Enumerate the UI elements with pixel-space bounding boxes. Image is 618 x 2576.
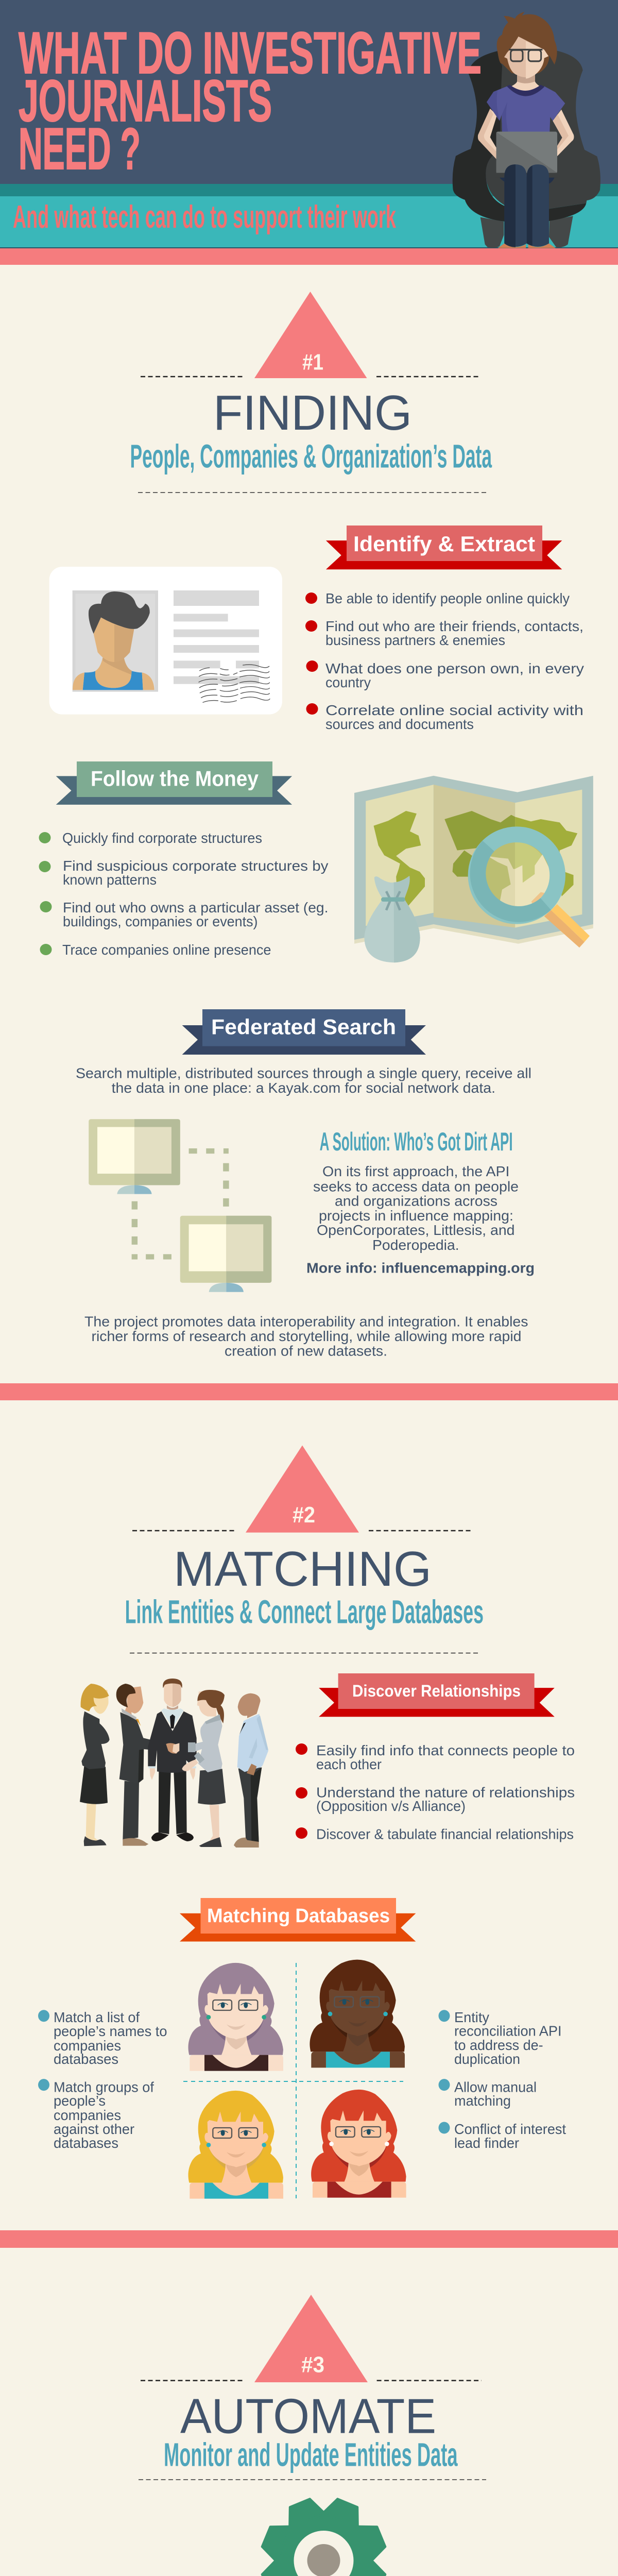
icon: id card xyxy=(49,567,282,715)
panel: section 3 automate xyxy=(80,2295,558,2576)
list: matching tools: to address de- xyxy=(454,2037,543,2053)
list: matching tools: matching xyxy=(454,2093,511,2109)
list: follow the money: Find suspicious corporate structures by xyxy=(63,858,329,874)
list: discover relationships: Discover & tabulate financial relationships xyxy=(316,1826,574,1842)
solution text block xyxy=(306,1163,535,1276)
list: identify and extract: country xyxy=(325,674,371,690)
list: follow the money xyxy=(39,830,329,958)
list: match people: people’s names to xyxy=(54,2023,167,2039)
panel: header xyxy=(0,0,618,265)
list: discover relationships: Understand the nature of relationships xyxy=(316,1785,575,1801)
text: project description: The project promotes data interoperability and integration. It enables xyxy=(84,1314,528,1330)
list: follow the money: Find out who owns a particular asset (eg. xyxy=(63,900,329,916)
ribbon: federated search xyxy=(182,1009,426,1055)
illustration: five business people shaking hands xyxy=(80,1679,268,1848)
list: matching tools: reconciliation API xyxy=(454,2023,562,2039)
solution text block: On its first approach, the API xyxy=(322,1163,510,1179)
section 1 heading: FINDING xyxy=(213,385,412,440)
list: identify and extract xyxy=(305,590,584,732)
list: identify and extract: Find out who are their friends, contacts, xyxy=(325,618,583,634)
list: follow the money: buildings, companies or events) xyxy=(63,913,258,929)
section 3 heading: AUTOMATE xyxy=(180,2389,436,2444)
list: matching tools: Entity xyxy=(454,2009,489,2025)
panel: section 1 finding xyxy=(39,292,593,1359)
list: follow the money: known patterns xyxy=(63,872,157,888)
text: project description xyxy=(84,1314,528,1359)
ribbon: discover relationships xyxy=(319,1673,555,1717)
list: matching tools: Allow manual xyxy=(454,2079,537,2095)
list: identify and extract: sources and documents xyxy=(325,716,474,732)
ribbon: identify and extract: Identify & Extract xyxy=(353,532,535,556)
title: JOURNALISTS xyxy=(19,69,272,134)
list: match people: companies xyxy=(54,2107,121,2123)
solution text block: and organizations across xyxy=(335,1193,497,1209)
list: discover relationships xyxy=(296,1742,575,1842)
ribbon: matching databases: Matching Databases xyxy=(207,1905,390,1927)
title: NEED ? xyxy=(19,116,141,182)
list: match people: companies xyxy=(54,2038,121,2054)
list: matching tools: lead finder xyxy=(454,2135,519,2151)
text: federated search description: the data in one place: a Kayak.com for social network data. xyxy=(112,1080,495,1096)
list: identify and extract: What does one person own, in every xyxy=(325,660,584,676)
list: match people xyxy=(38,2009,167,2151)
list: identify and extract: Be able to identify people online quickly xyxy=(325,590,570,606)
list: discover relationships: each other xyxy=(316,1756,382,1772)
list: match people: Match a list of xyxy=(54,2009,140,2025)
ribbon: discover relationships: Discover Relationships xyxy=(352,1682,521,1700)
list: matching tools xyxy=(439,2009,566,2151)
section 2 heading: MATCHING xyxy=(174,1541,432,1597)
icon: world map with magnifier and money bag xyxy=(354,776,593,962)
text: project description: creation of new datasets. xyxy=(225,1343,387,1359)
ribbon: follow the money xyxy=(56,761,292,805)
text: project description: richer forms of research and storytelling, while allowing more rapid xyxy=(92,1328,521,1344)
solution text block: Poderopedia. xyxy=(372,1237,459,1253)
illustration: four women portraits with dashed cross xyxy=(183,1960,406,2199)
list: discover relationships: (Opposition v/s Alliance) xyxy=(316,1798,466,1814)
section 2 badge: #2 xyxy=(293,1502,315,1528)
list: matching tools: duplication xyxy=(454,2051,520,2067)
list: matching tools: Conflict of interest xyxy=(454,2121,566,2137)
section 1 badge xyxy=(141,292,481,378)
section 3 badge: #3 xyxy=(301,2352,324,2378)
solution text block: seeks to access data on people xyxy=(313,1179,519,1194)
section 1 badge: #1 xyxy=(302,349,323,375)
list: follow the money: Trace companies online presence xyxy=(62,942,271,958)
section 3 badge xyxy=(141,2295,482,2382)
header background bands xyxy=(0,0,618,265)
solution text block: OpenCorporates, Littlesis, and xyxy=(317,1222,515,1238)
ribbon: follow the money: Follow the Money xyxy=(91,767,259,790)
solution text block: More info: influencemapping.org xyxy=(306,1260,535,1276)
ribbon: identify and extract xyxy=(326,526,562,569)
ribbon: matching databases xyxy=(180,1898,416,1942)
list: match people: Match groups of xyxy=(54,2079,154,2095)
list: match people: databases xyxy=(54,2135,118,2151)
list: discover relationships: Easily find info that connects people to xyxy=(316,1742,575,1758)
list: match people: against other xyxy=(54,2121,134,2137)
icon: two connected monitors xyxy=(89,1119,271,1292)
list: match people: people’s xyxy=(54,2093,106,2109)
text: federated search description: Search multiple, distributed sources through a single query, receive all xyxy=(76,1065,531,1081)
title xyxy=(19,21,482,182)
list: identify and extract: Correlate online social activity with xyxy=(325,702,583,718)
list: match people: databases xyxy=(54,2051,118,2067)
text: federated search description xyxy=(76,1065,531,1096)
section 2 badge xyxy=(132,1446,473,1533)
illustration: journalist with laptop in armchair xyxy=(453,12,600,248)
list: identify and extract: business partners & enemies xyxy=(325,632,505,648)
list: follow the money: Quickly find corporate structures xyxy=(62,830,262,846)
panel: section 2 matching xyxy=(38,1446,575,2199)
ribbon: federated search: Federated Search xyxy=(211,1015,396,1039)
solution text block: projects in influence mapping: xyxy=(319,1208,513,1224)
icon: green gear xyxy=(259,2496,388,2576)
